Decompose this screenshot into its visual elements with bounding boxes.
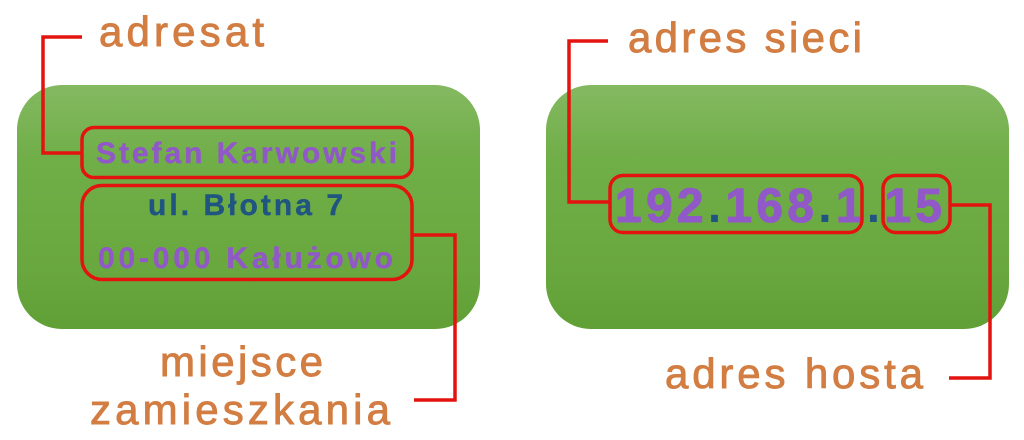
label: miejsce zamieszkania: miejsce xyxy=(160,338,323,385)
highlight: network part box xyxy=(610,176,862,232)
highlight: recipient box xyxy=(82,128,412,178)
text: IP address: 192.168.1.15 xyxy=(615,180,942,233)
text: postal code and town: 00-000 Kałużowo xyxy=(98,242,393,275)
arrow: adres sieci connector xyxy=(569,41,610,202)
text: recipient name: Stefan Karwowski xyxy=(96,137,397,170)
label: adres hosta: adres hosta xyxy=(665,350,924,397)
highlight: host part box xyxy=(883,176,950,232)
panel: postal address xyxy=(17,85,480,329)
highlight: residence box xyxy=(82,186,412,280)
label: miejsce zamieszkania: zamieszkania xyxy=(90,386,391,433)
text: street: ul. Błotna 7 xyxy=(148,189,343,222)
label: adresat: adresat xyxy=(99,8,264,55)
arrow: adresat connector xyxy=(43,37,82,153)
label: adres sieci: adres sieci xyxy=(628,14,862,61)
panel: IP address xyxy=(546,85,1009,329)
arrow: miejsce zamieszkania connector xyxy=(412,235,455,400)
arrow: adres hosta connector xyxy=(949,205,990,378)
label: miejsce zamieszkania xyxy=(90,338,391,433)
